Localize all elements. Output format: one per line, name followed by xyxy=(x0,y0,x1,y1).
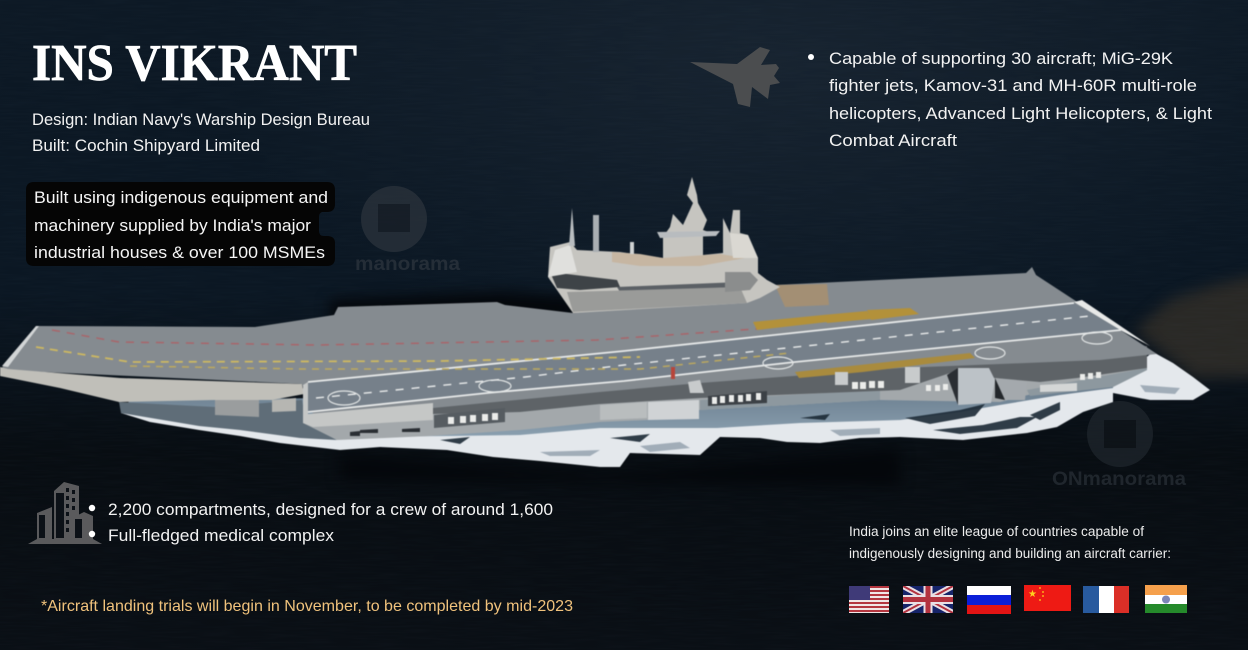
bow sponsons xyxy=(215,400,259,417)
callout: indigenous equipment: machinery supplied by India's major xyxy=(34,216,311,235)
left hull xyxy=(119,400,337,440)
deck end panel xyxy=(1074,300,1150,346)
main hull side xyxy=(303,347,1147,440)
aircraft capability bullet: helicopters, Advanced Light Helicopters, & Light xyxy=(829,104,1212,123)
bow lip xyxy=(0,367,304,402)
elite league text: India joins an elite league of countries capable of xyxy=(849,524,1144,539)
sand panel xyxy=(775,284,829,307)
elite league text xyxy=(849,524,1171,561)
flight deck xyxy=(0,267,1157,414)
lower hull shading xyxy=(700,368,1147,410)
wake dark gaps xyxy=(440,402,1060,444)
compartments bullets: 2,200 compartments, designed for a crew of around 1,600 xyxy=(108,500,553,519)
red mark xyxy=(671,367,675,379)
flag: Russia xyxy=(967,586,1011,614)
footnote: landing trials: *Aircraft landing trials will begin in November, to be completed by mid-2023 xyxy=(41,598,573,615)
angled deck outline block xyxy=(303,382,433,427)
water band against hull xyxy=(121,372,1113,437)
runway white lines xyxy=(308,303,1121,412)
flag: USA xyxy=(849,586,889,613)
aircraft carrier ship xyxy=(0,177,1210,467)
compartments bullets: Full-fledged medical complex xyxy=(108,526,335,545)
flag: France xyxy=(1083,586,1129,613)
aircraft capability bullet: Capable of supporting 30 aircraft; MiG-29K xyxy=(829,49,1174,68)
callout: indigenous equipment xyxy=(26,182,335,266)
compartments bullets xyxy=(89,500,553,545)
flag: India xyxy=(1145,585,1187,613)
masts xyxy=(593,215,599,252)
watermark: manorama upper xyxy=(355,186,460,275)
aircraft capability bullet: Combat Aircraft xyxy=(829,131,957,150)
watermark: manorama lower xyxy=(1052,401,1186,490)
flag: China: ★ xyxy=(1028,589,1037,600)
design and builder text xyxy=(32,110,370,155)
red deck dashes xyxy=(52,328,770,345)
icon: buildings xyxy=(28,482,102,544)
foam flecks xyxy=(540,385,1180,456)
angled deck runway xyxy=(308,303,1121,412)
gallery deck dark band xyxy=(433,346,1147,414)
yellow panels xyxy=(753,308,919,330)
watermark: manorama upper: manorama xyxy=(355,254,460,275)
watermark: manorama lower: ONmanorama xyxy=(1052,469,1186,490)
aircraft capability bullet xyxy=(808,49,1212,150)
sand roof xyxy=(612,252,745,266)
callout: indigenous equipment: industrial houses & over 100 MSMEs xyxy=(34,243,325,262)
flag: China xyxy=(1024,585,1071,611)
helipad circles xyxy=(328,332,1112,405)
icon: fighter jet xyxy=(690,47,780,107)
starboard sponsons and boats xyxy=(350,367,1101,436)
design and builder text: Built: Cochin Shipyard Limited xyxy=(32,136,260,155)
aircraft capability bullet: fighter jets, Kamov-31 and MH-60R multi-role xyxy=(829,76,1197,95)
wake: white water xyxy=(121,352,1210,467)
island superstructure xyxy=(548,177,780,313)
elite league text: indigenously designing and building an aircraft carrier: xyxy=(849,546,1171,561)
callout: indigenous equipment: Built using indigenous equipment and xyxy=(34,188,328,207)
lower level xyxy=(567,287,747,312)
design and builder text: Design: Indian Navy's Warship Design Bureau xyxy=(32,110,370,129)
flag: UK xyxy=(903,586,953,613)
window band xyxy=(550,272,620,290)
flags row xyxy=(849,585,1187,614)
yellow deck dashes xyxy=(36,347,640,362)
title: INS VIKRANT xyxy=(32,35,357,92)
